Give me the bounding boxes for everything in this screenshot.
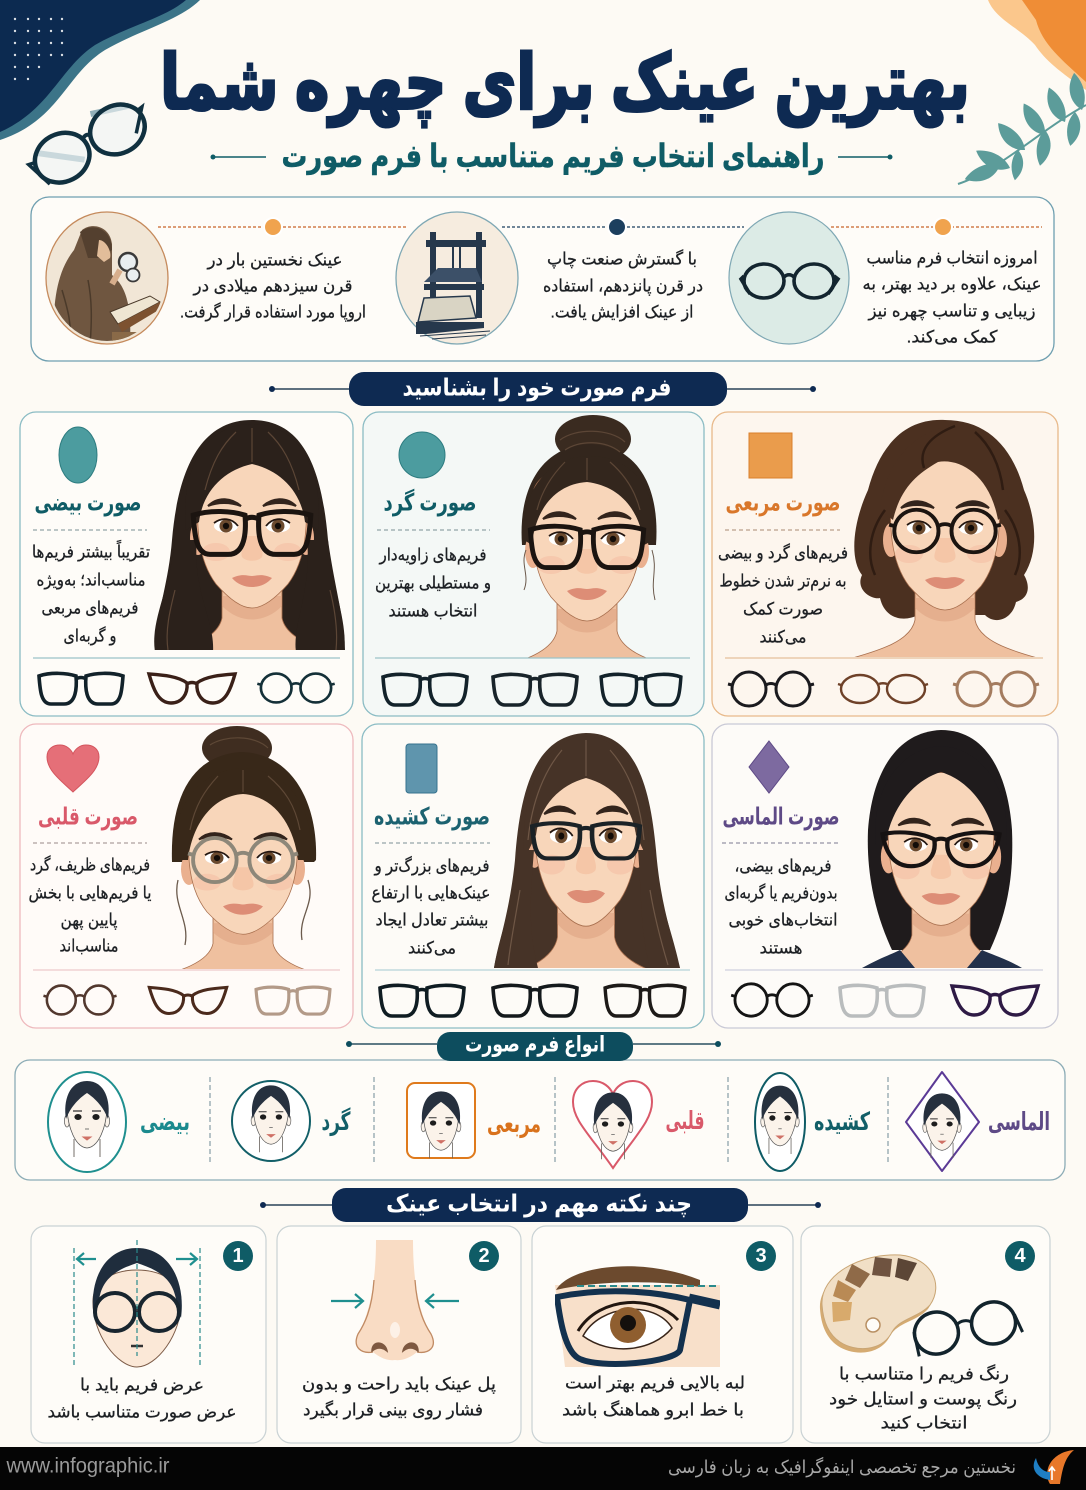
panel: face shape types <box>15 1060 1065 1180</box>
text: با خط ابرو هماهنگ باشد <box>562 1400 744 1420</box>
timeline dashes and dots <box>158 218 1042 236</box>
illustration: printing press <box>396 212 518 344</box>
heading: heart: صورت قلبی <box>38 804 138 830</box>
text block: مناسب‌اند <box>60 936 118 956</box>
text block: فریم‌های زاویه‌دار <box>379 546 486 566</box>
text: thirteenth century <box>180 250 366 322</box>
tip card 2: nose bridge <box>277 1226 521 1443</box>
heading: diamond: صورت الماسی <box>722 804 840 830</box>
text: thirteenth century: قرن سیزدهم میلادی در <box>193 276 352 296</box>
text block: فریم‌های بیضی، <box>734 856 832 876</box>
text: thirteenth century: اروپا مورد استفاده قرار گرفت. <box>180 302 366 322</box>
illustration: face width <box>74 1240 200 1367</box>
panel: oval face <box>20 412 353 716</box>
text <box>302 1374 496 1420</box>
panel: square face <box>712 412 1058 716</box>
icon: leafy branch <box>958 72 1086 187</box>
type: square <box>407 1083 541 1158</box>
heading: face shape types: انواع فرم صورت <box>465 1032 605 1058</box>
text block: بدون‌فریم یا گربه‌ای <box>724 882 838 904</box>
text block: یا فریم‌هایی با بخش <box>28 884 152 904</box>
text block: صورت کمک <box>743 600 823 618</box>
type: oblong: کشیده <box>814 1108 870 1136</box>
text block: تقریباً بیشتر فریم‌ها <box>32 539 150 562</box>
portrait: short wavy hair <box>854 420 1036 657</box>
illustration: palette and glasses <box>820 1255 1024 1358</box>
text: today: عینک، علاوه بر دید بهتر، به <box>862 274 1042 294</box>
text: fifteenth century <box>543 248 703 322</box>
text: عرض فریم باید با <box>80 1376 204 1396</box>
text block: و مستطیلی بهترین <box>375 574 491 594</box>
badge 1 <box>223 1241 253 1271</box>
icon: square shape <box>749 433 792 478</box>
type: heart <box>573 1081 704 1168</box>
decorative top-right blob <box>988 0 1086 90</box>
text block: می‌کنند <box>408 938 456 958</box>
text <box>48 1376 236 1422</box>
text block <box>28 854 152 956</box>
icon: oval shape <box>59 427 97 483</box>
heading: oval: صورت بیضی <box>34 490 142 516</box>
portrait: long dark hair <box>152 420 352 658</box>
glasses options <box>731 984 1038 1016</box>
text block: به نرم‌تر شدن خطوط <box>720 572 846 590</box>
portrait: hair bun <box>522 415 656 658</box>
tip card 3: brow line <box>532 1226 793 1443</box>
type: round <box>232 1081 351 1161</box>
heading: key tips: چند نکته مهم در انتخاب عینک <box>386 1190 692 1218</box>
heading: know your face shape <box>269 372 816 406</box>
badge 3 <box>746 1241 776 1271</box>
type: diamond: الماسی <box>988 1108 1050 1136</box>
text block <box>372 856 490 958</box>
panel: oblong face <box>362 724 704 1028</box>
text block <box>32 539 150 646</box>
text: today: کمک می‌کند. <box>906 328 998 346</box>
panel: round face <box>363 412 704 716</box>
glasses options <box>728 672 1039 706</box>
text block: فریم‌های ظریف، گرد <box>30 854 150 876</box>
glasses options <box>43 986 330 1014</box>
type: oval <box>48 1072 190 1172</box>
panel: history timeline <box>31 197 1054 361</box>
illustration: monk with magnifier <box>46 212 168 345</box>
footer tagline: نخستین مرجع تخصصی اینفوگرافیک به زبان فارسی <box>668 1456 1016 1478</box>
portrait: long straight hair <box>491 733 681 981</box>
badge 1: 1 <box>232 1245 244 1267</box>
footer url: www.infographic.ir <box>6 1454 170 1478</box>
text <box>562 1374 745 1420</box>
text: thirteenth century: عینک نخستین بار در <box>207 250 342 270</box>
text: today: زیبایی و تناسب چهره نیز <box>868 302 1036 322</box>
text block: فریم‌های بزرگ‌تر و <box>374 856 490 876</box>
text: fifteenth century: از عینک افزایش یافت. <box>550 302 694 322</box>
heading: round: صورت گرد <box>384 488 476 516</box>
text block: و گربه‌ای <box>64 626 116 646</box>
glasses options <box>383 674 681 705</box>
panel: heart face <box>20 724 353 1028</box>
illustration: eye with frame <box>555 1266 720 1367</box>
panel: diamond face <box>712 724 1058 1028</box>
icon: heart shape <box>47 745 99 792</box>
text block: پایین پهن <box>60 910 118 930</box>
icon: glasses top left <box>21 92 157 194</box>
icon: logo <box>1034 1450 1074 1484</box>
type: heart: قلبی <box>666 1107 704 1135</box>
type: diamond <box>906 1072 1050 1171</box>
text: رنگ پوست و استایل خود <box>829 1388 1017 1410</box>
text block: می‌کنند <box>760 628 806 646</box>
icon: circle shape <box>399 432 445 478</box>
text block: هستند <box>760 938 802 958</box>
text <box>829 1364 1017 1432</box>
text: today: امروزه انتخاب فرم مناسب <box>866 248 1038 268</box>
text: انتخاب کنید <box>880 1414 968 1432</box>
glasses options <box>380 985 685 1016</box>
illustration: nose <box>331 1240 459 1360</box>
text block: فریم‌های مربعی <box>42 598 138 618</box>
tip card 1: frame width <box>31 1226 266 1443</box>
heading: key tips <box>260 1188 821 1222</box>
subtitle: راهنمای انتخاب فریم متناسب با فرم صورت <box>282 138 824 175</box>
text block: فریم‌های گرد و بیضی <box>718 542 848 564</box>
text block: عینک‌هایی با ارتفاع <box>372 884 490 904</box>
text block: مناسب‌اند؛ به‌ویژه <box>36 570 146 590</box>
type: oblong <box>755 1073 870 1171</box>
type: oval: بیضی <box>140 1108 190 1136</box>
text block <box>724 856 838 958</box>
portrait: black hair <box>862 730 1022 968</box>
badge 2 <box>469 1241 499 1271</box>
heading: know your face shape: فرم صورت خود را بشناسید <box>402 374 672 402</box>
text: fifteenth century: در قرن پانزدهم، استفاده <box>543 276 703 296</box>
text block: بیشتر تعادل ایجاد <box>376 910 488 930</box>
text: fifteenth century: با گسترش صنعت چاپ <box>547 248 697 270</box>
badge 4: 4 <box>1014 1245 1026 1267</box>
text: عرض صورت متناسب باشد <box>48 1402 236 1422</box>
type: round: گرد <box>322 1107 351 1137</box>
text: رنگ فریم را متناسب با <box>839 1364 1009 1384</box>
tip card 4: color match <box>801 1226 1050 1443</box>
text: پل عینک باید راحت و بدون <box>302 1374 496 1394</box>
text: today <box>862 248 1042 346</box>
heading: face shape types <box>346 1032 721 1061</box>
badge 2: 2 <box>478 1245 490 1267</box>
heading: square: صورت مربعی <box>726 490 840 516</box>
glasses options <box>39 673 335 704</box>
text: فشار روی بینی قرار بگیرد <box>303 1400 483 1420</box>
type: square: مربعی <box>487 1110 541 1139</box>
badge 4 <box>1005 1241 1035 1271</box>
text: لبه بالایی فریم بهتر است <box>565 1374 745 1394</box>
icon: tall rectangle <box>406 744 437 793</box>
heading: oblong: صورت کشیده <box>374 804 490 830</box>
text block: انتخاب‌های خوبی <box>728 910 838 930</box>
text block: انتخاب هستند <box>388 602 478 620</box>
illustration: glasses on mint circle <box>729 212 849 344</box>
portrait: bun with glasses <box>172 726 316 969</box>
icon: diamond shape <box>749 741 789 793</box>
decorative top-left blob <box>0 0 200 140</box>
text block <box>718 542 848 646</box>
footer <box>0 1447 1086 1490</box>
text block <box>375 546 491 620</box>
badge 3: 3 <box>755 1245 767 1267</box>
